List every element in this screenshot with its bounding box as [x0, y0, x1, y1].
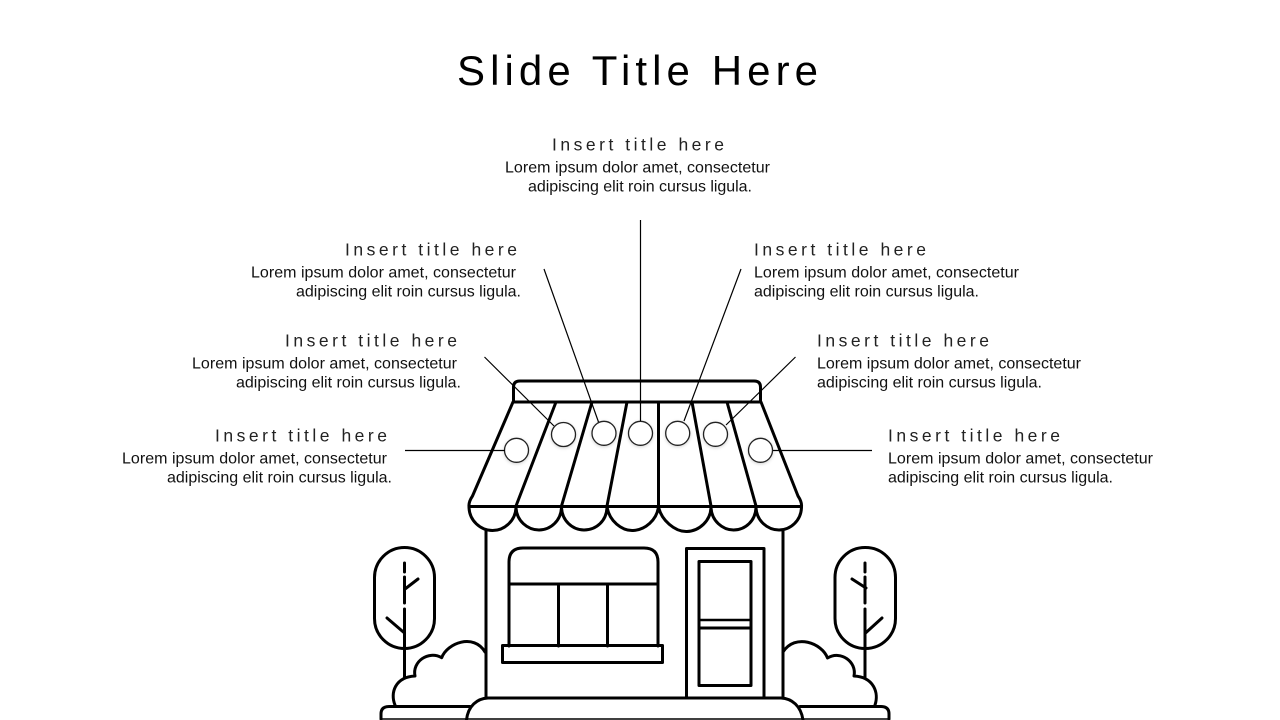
callout: top [505, 134, 771, 196]
right bush [783, 642, 876, 705]
shop walls [486, 530, 783, 698]
callout: lower right: Lorem ipsum dolor amet, consectetur [888, 450, 1154, 468]
left bush [393, 642, 485, 705]
callout: upper left: Lorem ipsum dolor amet, consectetur [251, 264, 517, 282]
leader lines [405, 220, 872, 450]
callout: upper left: adipiscing elit roin cursus ligula. [296, 284, 521, 300]
callout: upper left: Insert title here [345, 240, 517, 260]
callout: middle right: Lorem ipsum dolor amet, consectetur [817, 356, 1082, 372]
right ground platform [800, 706, 889, 719]
callout: middle left [192, 330, 461, 392]
awning top bar [514, 381, 760, 402]
shop window [502, 548, 662, 662]
callout: middle left: adipiscing elit roin cursus ligula. [236, 374, 461, 392]
callout: lower left: Insert title here [215, 426, 387, 446]
marker circles [504, 421, 772, 462]
callout: lower right: adipiscing elit roin cursus ligula. [888, 470, 1113, 486]
callout: middle left: Insert title here [285, 330, 457, 350]
callout: upper right: Insert title here [754, 240, 926, 260]
callout: top: Lorem ipsum dolor amet, consectetur [505, 160, 771, 176]
shop base step [466, 698, 803, 720]
callout: middle right: adipiscing elit roin cursus ligula. [817, 374, 1042, 392]
ground line [380, 718, 890, 720]
left ground platform [381, 706, 470, 719]
callout: lower left [122, 426, 392, 486]
left tree [374, 548, 434, 677]
callout: middle left: Lorem ipsum dolor amet, consectetur [192, 356, 458, 372]
callout: upper right [754, 240, 1020, 300]
callout: middle right [817, 330, 1082, 392]
right tree [835, 548, 896, 677]
callout: upper right: adipiscing elit roin cursus ligula. [754, 284, 979, 300]
shop door [686, 548, 764, 698]
callout: top: Insert title here [552, 134, 724, 154]
callout: lower left: Lorem ipsum dolor amet, consectetur [122, 450, 388, 468]
callout: middle right: Insert title here [817, 330, 989, 350]
callout: top: adipiscing elit roin cursus ligula. [528, 178, 752, 196]
awning [469, 402, 802, 532]
callout: upper right: Lorem ipsum dolor amet, consectetur [754, 264, 1020, 282]
title: Slide Title Here [457, 47, 818, 94]
callout: lower right: Insert title here [888, 426, 1060, 446]
callout: lower right [888, 426, 1154, 486]
callout: lower left: adipiscing elit roin cursus ligula. [167, 470, 392, 486]
callout: upper left [251, 240, 521, 300]
